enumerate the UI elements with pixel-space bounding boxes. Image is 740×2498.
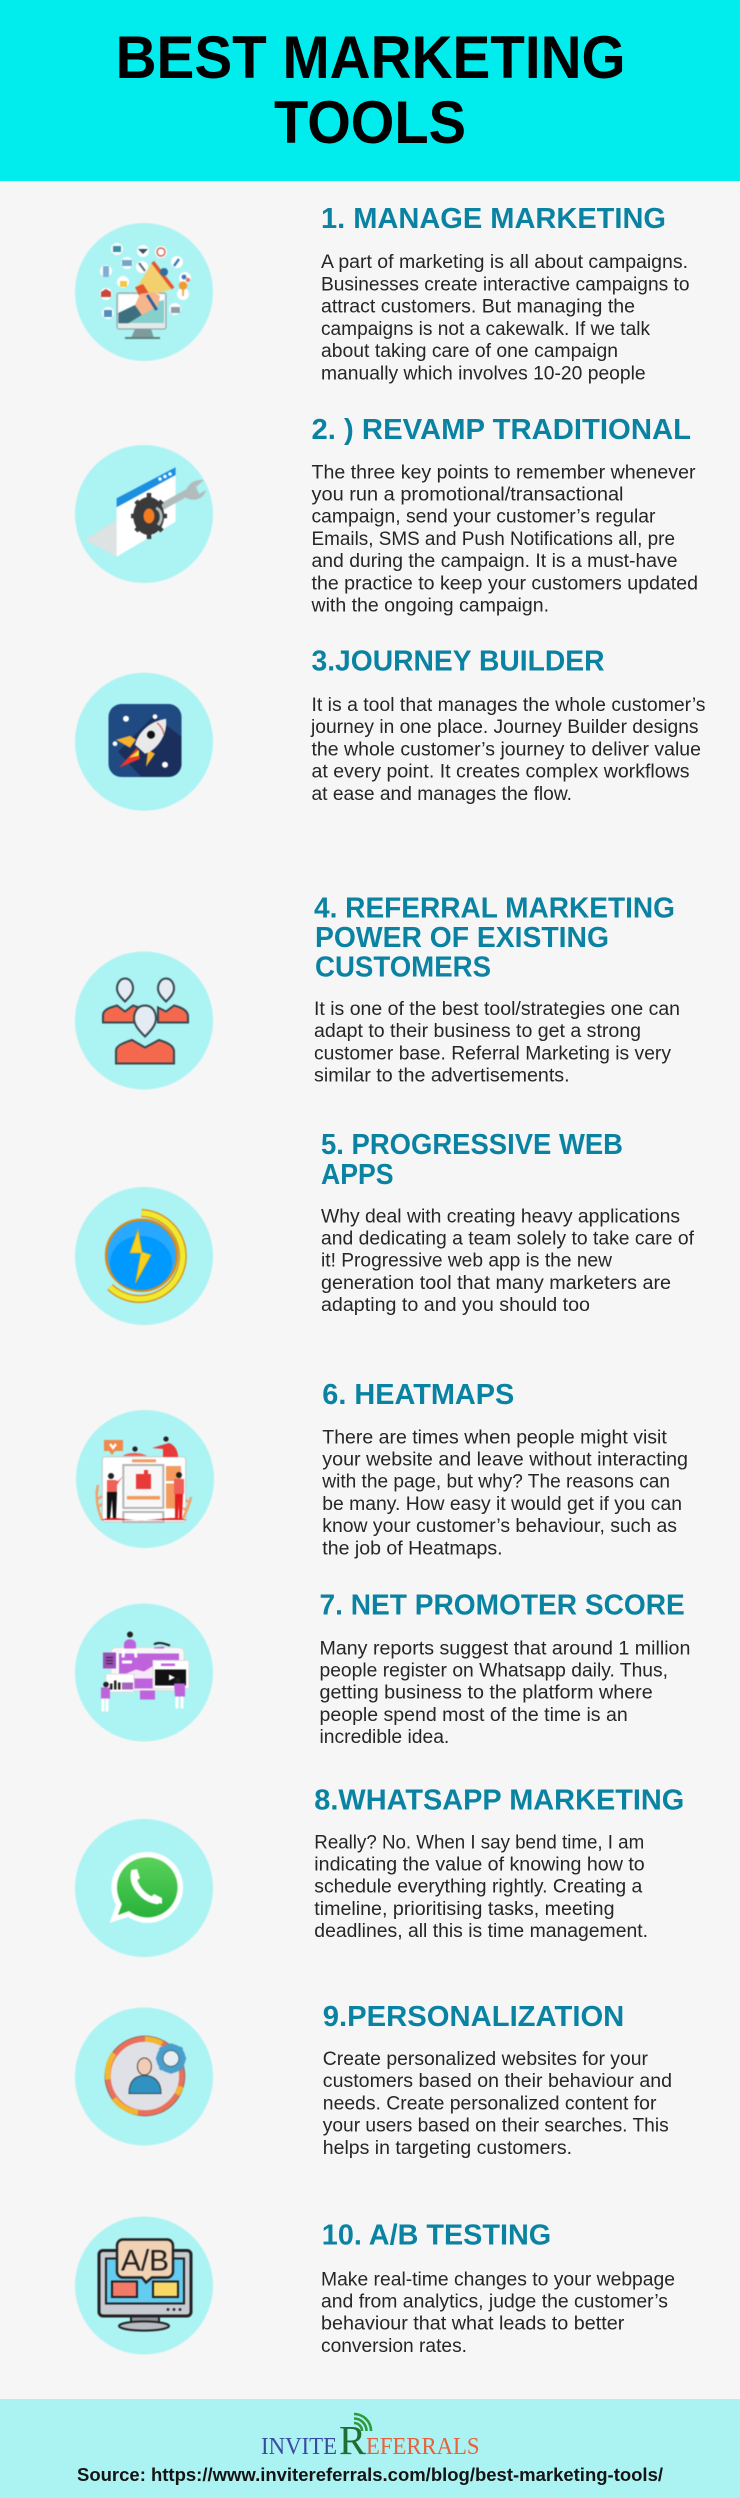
panel: 9 personalization bbox=[75, 2001, 672, 2159]
icon: browser window with gear and wrench bbox=[75, 445, 213, 583]
icon: monitor with A/B bubble bbox=[75, 2216, 213, 2354]
text block: Emails, SMS and Push Notifications all, pre bbox=[312, 529, 675, 550]
icon: people around web page bbox=[76, 1410, 214, 1548]
text block: adapt to their business to get a strong bbox=[314, 1021, 641, 1042]
text block: It is a tool that manages the whole customer’s bbox=[312, 695, 706, 716]
panel: 3 journey builder bbox=[75, 646, 706, 811]
title bbox=[116, 24, 626, 156]
heading: 2. ) REVAMP TRADITIONAL bbox=[312, 414, 691, 446]
heading bbox=[321, 1129, 623, 1191]
text block bbox=[310, 695, 706, 805]
text block: getting business to the platform where bbox=[320, 1683, 653, 1704]
text block bbox=[321, 1427, 688, 1559]
text block: A part of marketing is all about campaigns. bbox=[321, 252, 688, 273]
text block: Really? No. When I say bend time, I am bbox=[314, 1832, 644, 1853]
text block bbox=[310, 462, 698, 616]
heading: 7. NET PROMOTER SCORE bbox=[320, 1589, 685, 1621]
panel: 10 a/b testing bbox=[75, 2216, 675, 2357]
text block: similar to the advertisements. bbox=[314, 1066, 570, 1087]
text block: Why deal with creating heavy applications bbox=[321, 1206, 680, 1227]
heading: 6. HEATMAPS bbox=[322, 1379, 514, 1411]
icon: lightning bolt dial bbox=[75, 1187, 213, 1325]
text block bbox=[321, 1206, 695, 1316]
icon: megaphone and monitor bbox=[75, 223, 213, 361]
logo: invite referrals: R bbox=[339, 2417, 367, 2463]
text block bbox=[314, 1832, 648, 1942]
title: TOOLS bbox=[274, 89, 466, 156]
heading: 9.PERSONALIZATION bbox=[323, 2001, 624, 2033]
icon: three customers bbox=[75, 952, 213, 1090]
text block bbox=[320, 1638, 690, 1748]
text block: adapting to and you should too bbox=[321, 1295, 590, 1316]
text block: be many. How easy it would get if you can bbox=[322, 1494, 682, 1515]
text block: people spend most of the time is an bbox=[320, 1705, 628, 1726]
text block: and dedicating a team solely to take care of bbox=[321, 1228, 695, 1250]
text block: Create personalized websites for your bbox=[323, 2049, 649, 2070]
text block: and from analytics, judge the customer’s bbox=[321, 2292, 668, 2312]
logo: invite referrals: INVITE bbox=[261, 2434, 337, 2460]
text block: It is one of the best tool/strategies one can bbox=[314, 999, 680, 1020]
text block: schedule everything rightly. Creating a bbox=[314, 1877, 643, 1898]
text block: it! Progressive web app is the new bbox=[321, 1251, 612, 1272]
heading: APPS bbox=[321, 1159, 394, 1191]
text block: the practice to keep your customers updated bbox=[312, 573, 698, 594]
icon: user with gear bbox=[75, 2008, 213, 2146]
panel: 8 whatsapp marketing bbox=[75, 1784, 684, 1957]
text block: campaign, send your customer’s regular bbox=[312, 507, 656, 528]
text block: helps in targeting customers. bbox=[323, 2138, 572, 2159]
text block: needs. Create personalized content for bbox=[323, 2093, 657, 2114]
text block: conversion rates. bbox=[321, 2336, 467, 2357]
heading: CUSTOMERS bbox=[315, 952, 491, 984]
heading: POWER OF EXISTING bbox=[315, 922, 609, 954]
text block: at every point. It creates complex workflows bbox=[312, 762, 690, 783]
text block: journey in one place. Journey Builder designs bbox=[310, 717, 698, 738]
heading: 8.WHATSAPP MARKETING bbox=[314, 1784, 684, 1816]
panel: 1 manage marketing bbox=[75, 203, 690, 384]
heading: 5. PROGRESSIVE WEB bbox=[321, 1129, 623, 1161]
text block: There are times when people might visit bbox=[322, 1427, 668, 1448]
text block bbox=[321, 252, 690, 384]
icon: dashboard team bbox=[75, 1604, 213, 1742]
text block: with the ongoing campaign. bbox=[310, 596, 549, 616]
text block: at ease and manages the flow. bbox=[312, 784, 572, 805]
icon: whatsapp logo bbox=[75, 1819, 213, 1957]
text block: your website and leave without interacting bbox=[322, 1450, 688, 1470]
logo: invite referrals bbox=[261, 2414, 480, 2463]
text block: Make real-time changes to your webpage bbox=[321, 2269, 675, 2290]
source line: Source: https://www.invitereferrals.com/blog/best-marketing-tools/ bbox=[77, 2464, 663, 2485]
icon: monitor with A/B bubble: A/B bbox=[121, 2244, 169, 2278]
heading bbox=[314, 892, 675, 984]
text block: generation tool that many marketers are bbox=[321, 1273, 671, 1294]
text block: Many reports suggest that around 1 million bbox=[320, 1638, 690, 1659]
text block: about taking care of one campaign bbox=[321, 341, 618, 362]
heading: 1. MANAGE MARKETING bbox=[321, 203, 666, 235]
footer bbox=[0, 2399, 740, 2498]
icon: rocket app tile bbox=[75, 673, 213, 811]
text block: customers based on their behaviour and bbox=[323, 2071, 672, 2092]
text block: and during the campaign. It is a must-have bbox=[312, 551, 678, 572]
heading: 3.JOURNEY BUILDER bbox=[312, 646, 605, 678]
text block: indicating the value of knowing how to bbox=[314, 1854, 645, 1876]
panel: 2 revamp traditional bbox=[75, 414, 698, 616]
text block: attract customers. But managing the bbox=[321, 297, 635, 318]
panel: 6 heatmaps bbox=[76, 1379, 688, 1559]
text block: timeline, prioritising tasks, meeting bbox=[314, 1899, 614, 1920]
text block: your users based on their searches. This bbox=[323, 2116, 669, 2137]
logo: invite referrals: EFERRALS bbox=[366, 2434, 480, 2460]
text block: know your customer’s behaviour, such as bbox=[322, 1516, 677, 1537]
text block: incredible idea. bbox=[320, 1727, 449, 1748]
text block: Businesses create interactive campaigns to bbox=[321, 274, 690, 296]
text block: with the page, but why? The reasons can bbox=[321, 1472, 670, 1493]
text block: campaigns is not a cakewalk. If we talk bbox=[321, 319, 650, 340]
heading: 10. A/B TESTING bbox=[322, 2219, 551, 2251]
panel: 4 referral marketing bbox=[75, 892, 680, 1090]
header banner bbox=[0, 0, 740, 181]
heading: 4. REFERRAL MARKETING bbox=[314, 892, 675, 924]
panel: 7 net promoter score bbox=[75, 1589, 690, 1748]
text block: you run a promotional/transactional bbox=[312, 484, 624, 506]
panel: 5 progressive web apps bbox=[75, 1129, 695, 1325]
text block: manually which involves 10-20 people bbox=[321, 363, 646, 384]
text block: people register on Whatsapp daily. Thus, bbox=[320, 1660, 668, 1682]
text block bbox=[314, 999, 680, 1087]
title: BEST MARKETING bbox=[116, 24, 626, 91]
text block: the whole customer’s journey to deliver value bbox=[312, 739, 701, 760]
text block bbox=[321, 2269, 675, 2357]
text block: customer base. Referral Marketing is very bbox=[314, 1043, 672, 1064]
text block: deadlines, all this is time management. bbox=[314, 1921, 648, 1942]
text block: behaviour that what leads to better bbox=[321, 2314, 625, 2335]
text block: The three key points to remember whenever bbox=[312, 462, 696, 483]
text block bbox=[323, 2049, 672, 2159]
text block: the job of Heatmaps. bbox=[322, 1538, 503, 1559]
